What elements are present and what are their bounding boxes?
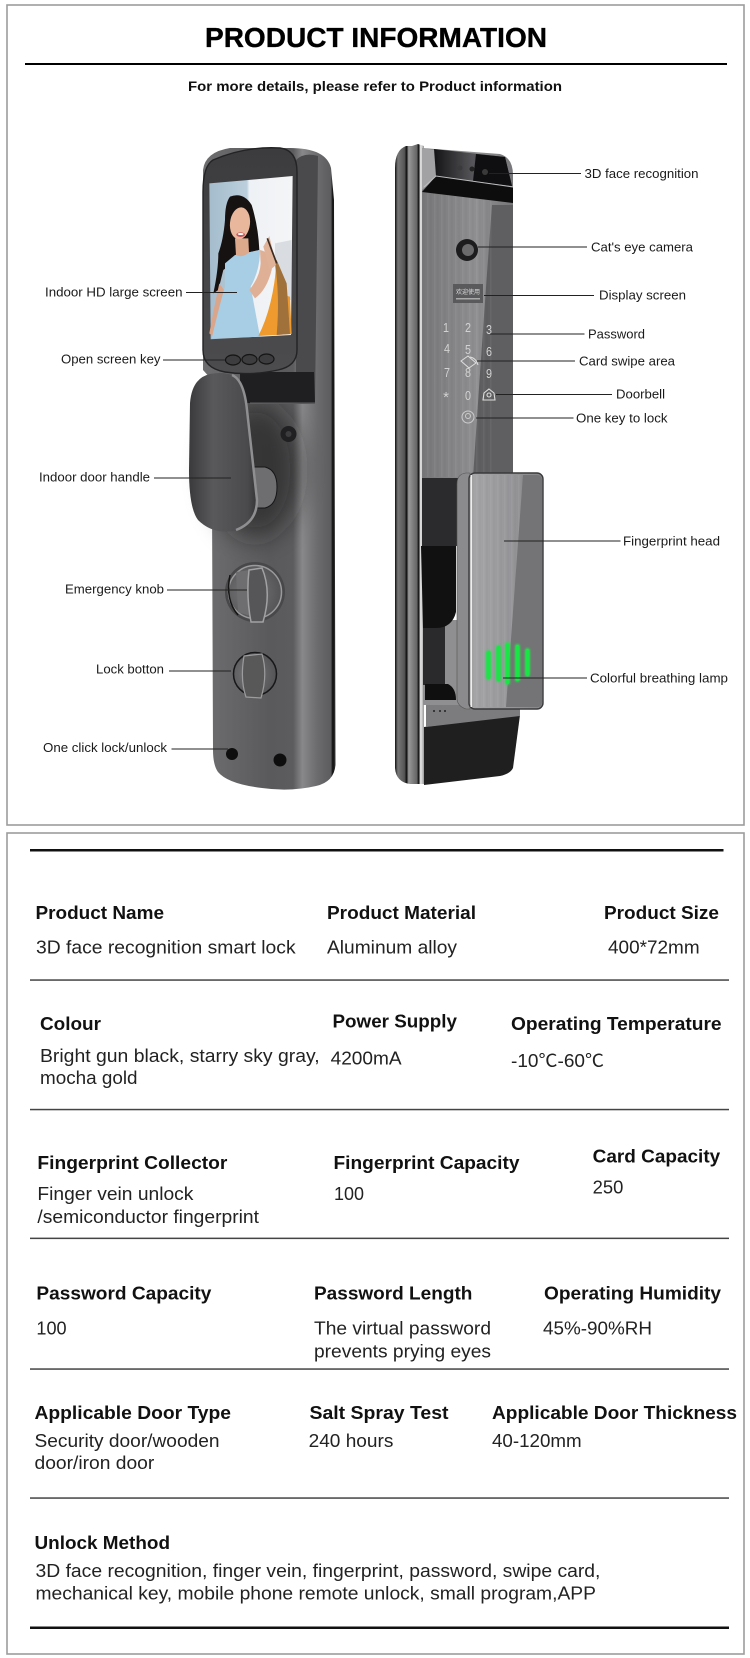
- spec: Password Length: The virtual password: [314, 1318, 491, 1338]
- keypad: 3: [486, 322, 492, 337]
- spec: Product Size: 400*72mm: [608, 938, 700, 958]
- shaft: [250, 467, 277, 508]
- spec: Power Supply: 4200mA: [331, 1048, 402, 1068]
- callout: Colorful breathing lamp: Colorful breathing lamp: [590, 672, 728, 686]
- sensor: [280, 426, 296, 442]
- icon: doorbell: [483, 389, 495, 400]
- panel: specifications: [7, 833, 744, 1654]
- colourful breathing lamp: [486, 642, 530, 685]
- keypad: 5: [465, 342, 471, 357]
- spec: Password Length: Password Length: [314, 1284, 472, 1304]
- fingerprint head: [457, 473, 543, 709]
- callout: Fingerprint head: Fingerprint head: [623, 534, 720, 548]
- open screen keys: [226, 354, 274, 365]
- display screen: [453, 284, 483, 303]
- spec: Unlock Method: mechanical key, mobile phone remote unlock, small program,APP: [36, 1584, 596, 1604]
- keypad: 9: [486, 366, 492, 381]
- keypad: 1: [443, 320, 449, 335]
- spec: Unlock Method: 3D face recognition, finger vein, fingerprint, password, swipe card,: [36, 1561, 600, 1581]
- keypad: [443, 320, 492, 406]
- keypad: 4: [444, 341, 450, 356]
- spec: Product Material: [327, 903, 476, 958]
- callout: Display screen: Display screen: [599, 288, 686, 302]
- spec: Power Supply: [331, 1012, 457, 1068]
- keypad: 7: [444, 365, 450, 380]
- spec: Salt Spray Test: [309, 1403, 449, 1451]
- spec: Password Length: prevents prying eyes: [314, 1342, 491, 1362]
- spec: Card Capacity: [593, 1147, 720, 1197]
- spec: Fingerprint Capacity: Fingerprint Capacity: [334, 1153, 520, 1173]
- callout: 3D face recognition: 3D face recognition: [584, 167, 699, 181]
- camera head: [422, 148, 436, 190]
- spec: Operating Humidity: [543, 1284, 721, 1338]
- spec: Card Capacity: Card Capacity: [593, 1147, 720, 1167]
- keypad: 6: [486, 344, 492, 359]
- spec: Colour: mocha gold: [40, 1068, 138, 1088]
- icon: card swipe: [461, 356, 478, 368]
- spec: Fingerprint Collector: Finger vein unlock: [37, 1184, 194, 1204]
- spec: Operating Humidity: Operating Humidity: [544, 1284, 721, 1304]
- spec: Applicable Door Thickness: 40-120mm: [492, 1431, 582, 1451]
- one click lock holes: [226, 748, 238, 760]
- callout: Indoor HD large screen: Indoor HD large screen: [45, 286, 183, 300]
- spec: Fingerprint Collector: Fingerprint Collector: [37, 1153, 227, 1173]
- keypad: *: [443, 389, 449, 406]
- screen bezel: [203, 148, 297, 374]
- spec: Product Material: Aluminum alloy: [327, 938, 457, 958]
- lock button: [234, 652, 276, 698]
- spec: Product Size: Product Size: [604, 903, 719, 923]
- spec: Applicable Door Type: Security door/wooden: [34, 1431, 219, 1451]
- spec: Product Size: [604, 903, 719, 958]
- spec: Applicable Door Thickness: Applicable Door Thickness: [492, 1403, 737, 1423]
- spec: Password Capacity: Password Capacity: [36, 1284, 211, 1304]
- spec: Operating Temperature: [511, 1014, 722, 1071]
- spec: Fingerprint Capacity: 100: [334, 1184, 364, 1204]
- illustration: indoor lock front: [189, 148, 336, 790]
- icon: one key lock: [462, 411, 474, 423]
- spec: Applicable Door Thickness: [492, 1403, 737, 1451]
- callout: Emergency knob: Emergency knob: [65, 582, 164, 596]
- spec: Operating Humidity: 45%-90%RH: [543, 1318, 652, 1338]
- side rails: [395, 144, 424, 784]
- spec: Unlock Method: Unlock Method: [34, 1533, 170, 1553]
- keypad: 8: [465, 365, 471, 380]
- mid section: [423, 620, 463, 705]
- callout: Lock botton: Lock botton: [96, 662, 164, 676]
- screen photo: [209, 176, 293, 339]
- spec: Fingerprint Capacity: [334, 1153, 520, 1204]
- dark recess around handle: [211, 402, 299, 538]
- callout: One key to lock: One key to lock: [576, 412, 668, 426]
- spec: Password Capacity: [36, 1284, 211, 1338]
- spec: Fingerprint Collector: /semiconductor fingerprint: [37, 1207, 259, 1227]
- spec: Applicable Door Type: Applicable Door Type: [34, 1403, 231, 1423]
- speaker section: [426, 700, 520, 727]
- keypad: 0: [465, 388, 471, 403]
- callout: Open screen key: Open screen key: [61, 352, 161, 366]
- title underline: [25, 63, 727, 65]
- spec: Card Capacity: 250: [593, 1177, 623, 1197]
- spec: Applicable Door Type: door/iron door: [34, 1453, 154, 1473]
- spec: Salt Spray Test: Salt Spray Test: [310, 1403, 449, 1423]
- handle: [189, 373, 258, 532]
- spec: Applicable Door Type: [34, 1403, 231, 1473]
- spec: Password Capacity: 100: [36, 1318, 67, 1338]
- keypad: 2: [465, 320, 471, 335]
- spec: Fingerprint Collector: [37, 1153, 259, 1227]
- callout: Indoor door handle: Indoor door handle: [39, 470, 150, 484]
- spec: Colour: [40, 1014, 320, 1088]
- emergency knob: [225, 562, 285, 622]
- subtitle: For more details, please refer to Product information: [188, 78, 562, 94]
- spec: Colour: Colour: [40, 1014, 101, 1034]
- spec: Product Material: Product Material: [327, 903, 476, 923]
- panel: product diagram: [7, 5, 744, 825]
- callout: Password: Password: [588, 328, 645, 342]
- spec: Product Name: 3D face recognition smart lock: [36, 938, 297, 958]
- spec: Product Name: [36, 903, 297, 958]
- lower black base: [424, 715, 520, 785]
- spec: Power Supply: Power Supply: [332, 1012, 457, 1032]
- cat's eye camera: [456, 239, 478, 261]
- spec: Unlock Method: [34, 1533, 600, 1604]
- spec: Operating Temperature: -10℃-60℃: [511, 1051, 604, 1071]
- spec: Operating Temperature: Operating Temperature: [511, 1014, 722, 1034]
- display screen: 欢迎使用: [456, 288, 480, 296]
- callout: Cat's eye camera: Cat's eye camera: [591, 240, 693, 254]
- callout: Lock botton: [96, 662, 231, 676]
- callout: Card swipe area: Card swipe area: [579, 354, 675, 368]
- spec: Product Name: Product Name: [36, 903, 164, 923]
- spec: Password Length: [314, 1284, 491, 1362]
- spec: Colour: Bright gun black, starry sky gray,: [40, 1046, 320, 1066]
- front panel: [422, 148, 513, 478]
- spec: Salt Spray Test: 240 hours: [309, 1431, 393, 1451]
- callout: One click lock/unlock: One click lock/unlock: [43, 741, 168, 755]
- title: PRODUCT INFORMATION: [205, 22, 547, 53]
- illustration: outdoor lock front: [395, 144, 543, 785]
- callout: Doorbell: Doorbell: [616, 388, 665, 402]
